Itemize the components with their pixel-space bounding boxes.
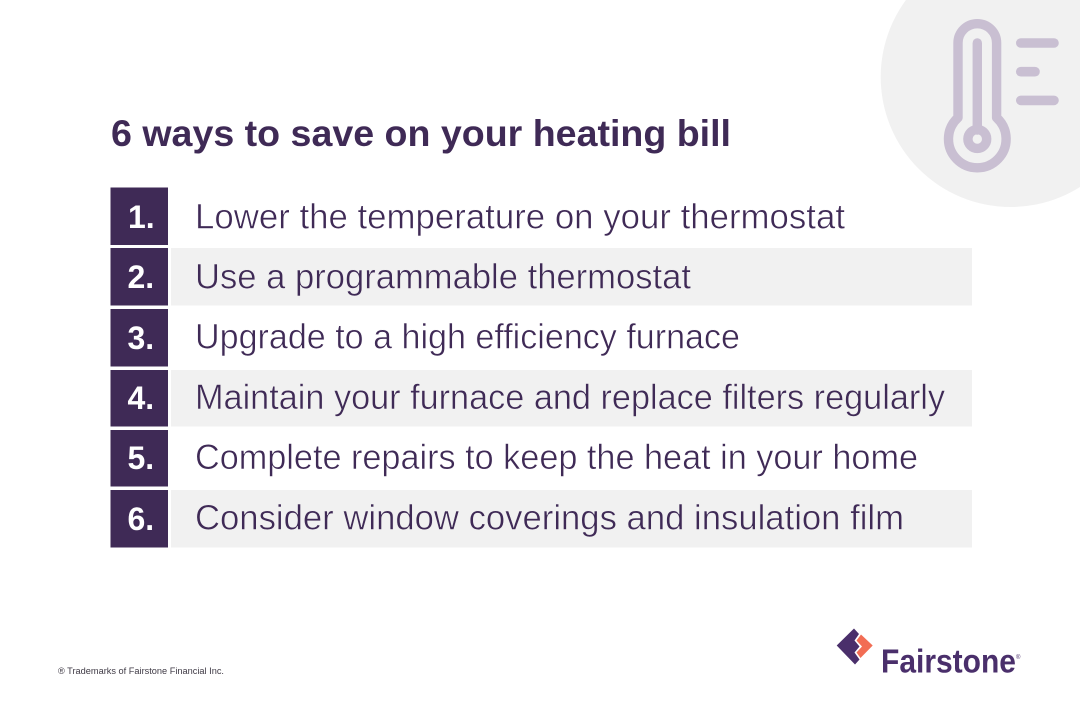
- list row 4: 4.: [128, 380, 154, 416]
- logo: Fairstone: ®: [1016, 654, 1021, 661]
- list row 2: 2.: [128, 259, 154, 295]
- logo: Fairstone: [837, 628, 1021, 679]
- list row 3: 3.: [128, 320, 154, 356]
- trademark note: ® Trademarks of Fairstone Financial Inc.: [58, 666, 224, 676]
- list row 2: Use a programmable thermostat: [195, 258, 691, 296]
- list row 1: 1.: [128, 199, 155, 235]
- logo: Fairstone: Fairstone: [881, 642, 1016, 679]
- title: 6 ways to save on your heating bill: [111, 113, 731, 154]
- list row 5: [110, 430, 918, 486]
- list row 5: Complete repairs to keep the heat in your home: [195, 438, 918, 477]
- list row 1: [110, 188, 845, 245]
- list row 4: [110, 370, 972, 426]
- list row 2: [110, 248, 972, 306]
- list row 3: [110, 309, 740, 366]
- list row 5: 5.: [128, 440, 154, 476]
- icon: thermometer in circle: [881, 0, 1080, 207]
- list row 4: Maintain your furnace and replace filters regularly: [195, 378, 945, 417]
- list row 3: Upgrade to a high efficiency furnace: [195, 318, 740, 357]
- list row 6: 6.: [128, 501, 154, 537]
- list row 1: Lower the temperature on your thermostat: [195, 197, 845, 236]
- list row 6: [110, 490, 972, 548]
- list row 6: Consider window coverings and insulation film: [195, 498, 904, 538]
